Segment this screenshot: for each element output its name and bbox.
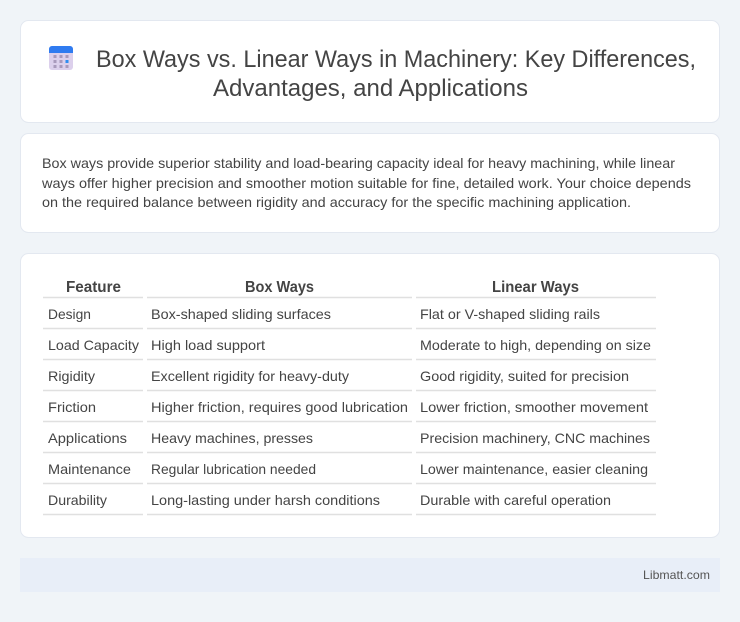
- panel: header: [20, 20, 720, 122]
- row: Maintenance: Lower maintenance, easier cleaning: [420, 461, 648, 477]
- row: Rigidity: Rigidity: [48, 368, 95, 384]
- row: Rigidity: Good rigidity, suited for precision: [420, 368, 629, 384]
- row: Design: Design: [48, 306, 91, 322]
- row: Friction: [43, 399, 656, 422]
- row: Durability: Long-lasting under harsh conditions: [151, 492, 380, 508]
- row: Applications: Heavy machines, presses: [151, 430, 313, 446]
- panel: comparison table: [20, 254, 720, 538]
- row: Friction: Higher friction, requires good lubrication: [151, 399, 408, 415]
- row: Durability: [43, 492, 656, 514]
- title: Box Ways vs. Linear Ways in Machinery: Key Differences,: [96, 46, 696, 73]
- intro text: Box ways provide superior stability and load-bearing capacity ideal for heavy machining, while linear: [42, 155, 675, 171]
- row: Durability: Durable with careful operation: [420, 492, 611, 508]
- row: Applications: Applications: [48, 430, 127, 446]
- intro text: ways offer higher precision and smoother motion suitable for fine, detailed work. Your choice depends: [41, 175, 691, 191]
- row: Load Capacity: Load Capacity: [48, 337, 139, 353]
- row: Rigidity: Excellent rigidity for heavy-duty: [151, 368, 349, 384]
- row: Maintenance: [43, 461, 656, 484]
- row: Maintenance: Maintenance: [48, 461, 131, 477]
- row: Maintenance: Regular lubrication needed: [151, 461, 316, 477]
- table header: [43, 279, 656, 298]
- intro text: on the required balance between rigidity and accuracy for the specific machining application.: [42, 194, 631, 210]
- row: Design: [43, 306, 656, 328]
- table header: Box Ways: [245, 279, 314, 296]
- footer: [20, 558, 720, 592]
- footer credit: Libmatt.com: [643, 568, 710, 582]
- title: Advantages, and Applications: [213, 75, 528, 102]
- row: Applications: Precision machinery, CNC machines: [420, 430, 650, 446]
- row: Rigidity: [43, 368, 656, 390]
- row: Friction: Friction: [48, 399, 96, 415]
- icon: calendar: [49, 46, 73, 70]
- table header: Feature: [66, 279, 121, 296]
- row: Load Capacity: High load support: [151, 337, 265, 353]
- row: Friction: Lower friction, smoother movement: [420, 399, 648, 415]
- row: Load Capacity: Moderate to high, depending on size: [420, 337, 651, 353]
- row: Load Capacity: [43, 337, 656, 360]
- row: Design: Box-shaped sliding surfaces: [151, 306, 331, 322]
- row: Design: Flat or V-shaped sliding rails: [420, 306, 600, 322]
- row: Applications: [43, 430, 656, 452]
- row: Durability: Durability: [48, 492, 107, 508]
- table header: Linear Ways: [492, 279, 579, 296]
- panel: intro: [20, 134, 720, 232]
